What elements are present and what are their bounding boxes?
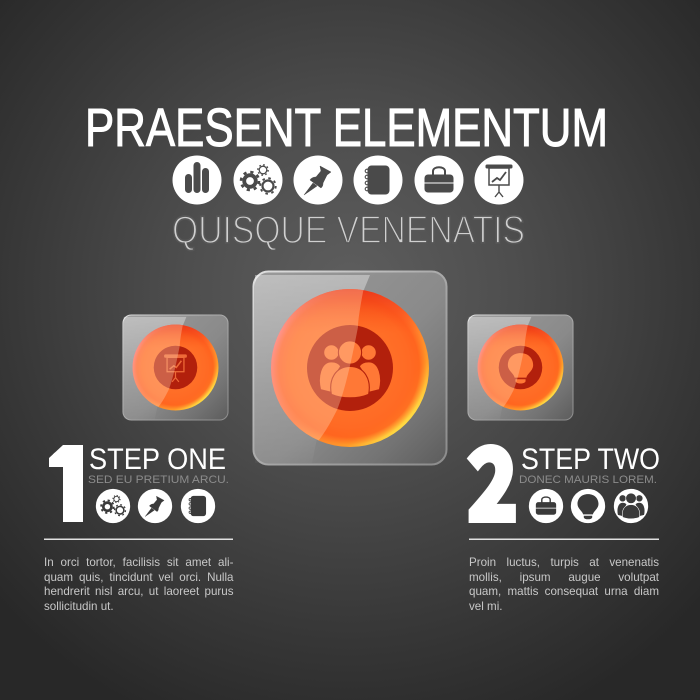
icon: people (319, 341, 381, 398)
subheading: step two: DONEC MAURIS LOREM. (519, 474, 657, 486)
panel: left glass orb (123, 315, 228, 420)
text block: step one body (44, 556, 234, 613)
text block: step one body: hendrerit nisl arcu, ut laoreet purus (44, 585, 234, 598)
text block: step one body: quam quis, tincidunt vel orci. Nulla (44, 571, 234, 584)
text block: step two body: quam, mattis consequat urna diam (469, 585, 659, 598)
number 2: 2 (468, 407, 517, 549)
text block: step one body: In orci tortor, facilisis sit amet ali- (44, 556, 234, 569)
panel: right glass orb (468, 315, 573, 420)
text block: step two body: Proin luctus, turpis at venenatis (469, 556, 659, 569)
heading: step two: STEP TWO (521, 443, 660, 476)
text block: step two body: mollis, ipsum augue volutpat (469, 571, 659, 584)
number 1: 1 (42, 402, 103, 551)
icon: gears (234, 156, 282, 204)
icon: notebook (181, 489, 215, 523)
panel: step one (44, 445, 233, 540)
icon: briefcase (529, 489, 563, 523)
icon: bar chart (172, 156, 222, 204)
icon: notebook (354, 156, 402, 204)
icon row: header (172, 156, 524, 204)
icon: presentation board (474, 156, 524, 204)
panel: center glass orb (254, 272, 446, 464)
panel: step two (468, 407, 660, 549)
icon: people (614, 489, 648, 523)
icon: gears (96, 489, 130, 523)
text block: step two body: vel mi. (469, 600, 502, 613)
text block: step two body (469, 556, 659, 613)
subheading: step one: SED EU PRETIUM ARCU. (88, 474, 229, 486)
icon: push pin (138, 489, 172, 523)
icon: light bulb (508, 353, 533, 384)
icon: push pin (294, 156, 342, 204)
icon: presentation board (165, 355, 186, 382)
text block: step one body: sollicitudin ut. (44, 600, 114, 613)
heading: step one: STEP ONE (89, 443, 226, 476)
icon: briefcase (414, 156, 464, 204)
icon: light bulb (571, 489, 605, 523)
subtitle: QUISQUE VENENATIS (172, 209, 525, 252)
